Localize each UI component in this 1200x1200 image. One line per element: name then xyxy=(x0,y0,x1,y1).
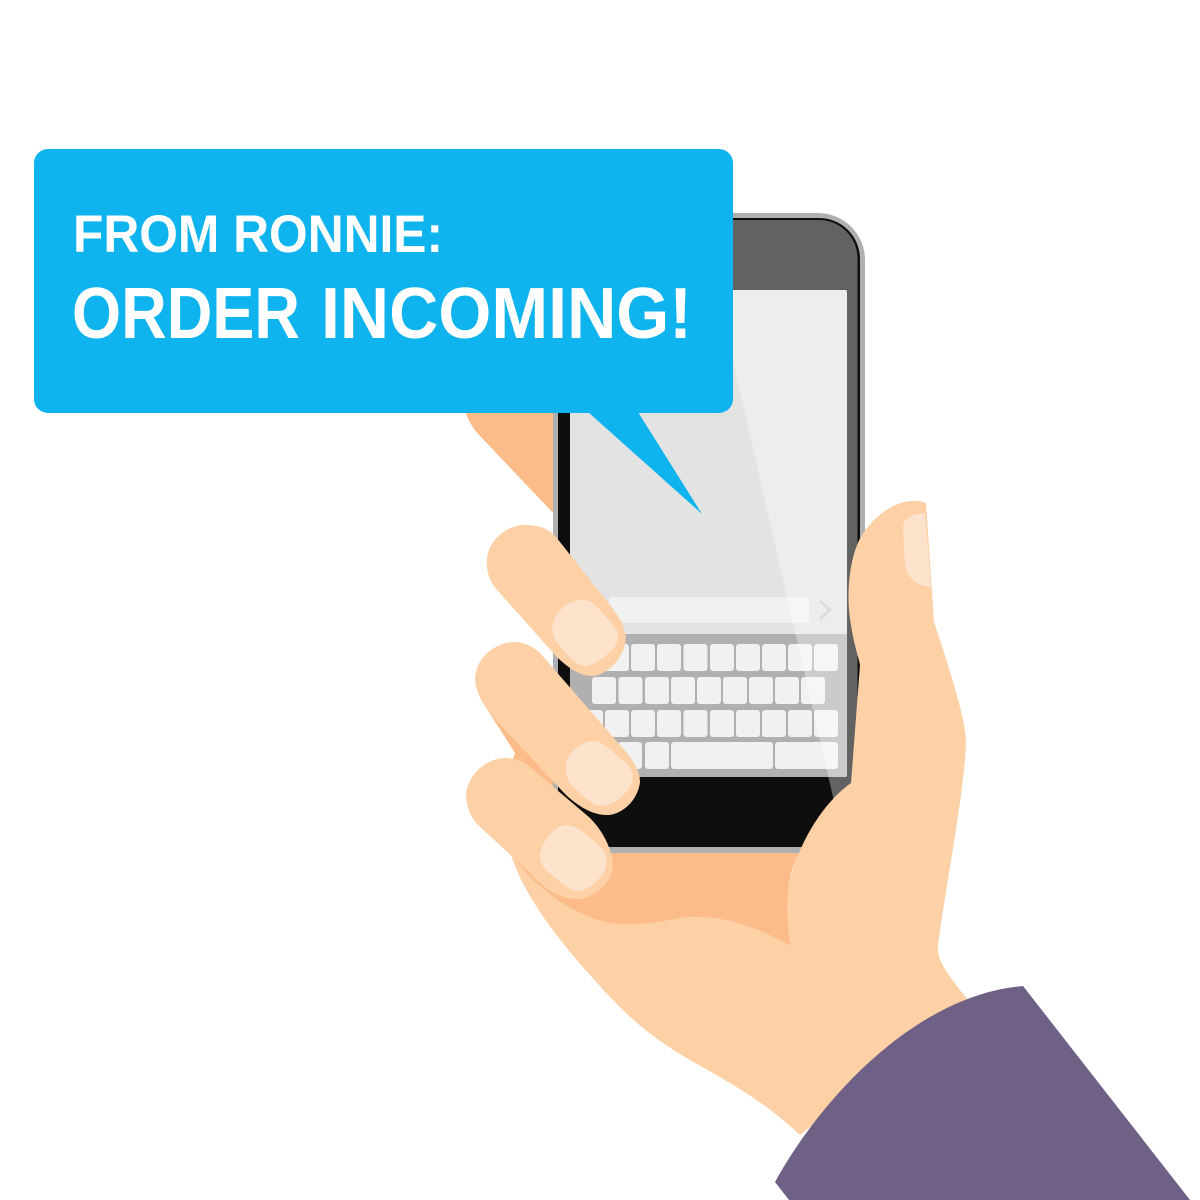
palm and wrist xyxy=(510,501,968,1135)
phone xyxy=(553,213,865,853)
palm shadow xyxy=(510,852,799,945)
bubble line 2: ORDER xyxy=(72,274,300,354)
keyboard xyxy=(570,634,847,777)
bubble body xyxy=(34,149,733,413)
bubble line 2 xyxy=(72,274,692,354)
shadow below middle finger xyxy=(480,698,553,795)
middle finger xyxy=(475,642,640,815)
thumbnail xyxy=(903,513,931,587)
bubble line 2: INCOMING! xyxy=(321,274,692,354)
message input field xyxy=(609,597,809,623)
hand xyxy=(466,501,968,1135)
ring fingernail xyxy=(540,825,607,891)
send arrow icon xyxy=(820,601,830,619)
middle fingernail xyxy=(566,741,633,806)
sleeve xyxy=(775,986,1190,1200)
index fingernail xyxy=(552,600,618,666)
speech bubble xyxy=(34,149,733,514)
phone body xyxy=(553,213,865,853)
ring finger xyxy=(466,758,613,899)
phone screen xyxy=(570,290,847,777)
bubble line 1: FROM RONNIE: xyxy=(73,205,443,264)
index finger xyxy=(487,525,626,676)
back of hand behind phone xyxy=(466,405,556,516)
bubble tail xyxy=(588,412,702,514)
screen glare xyxy=(733,220,858,798)
